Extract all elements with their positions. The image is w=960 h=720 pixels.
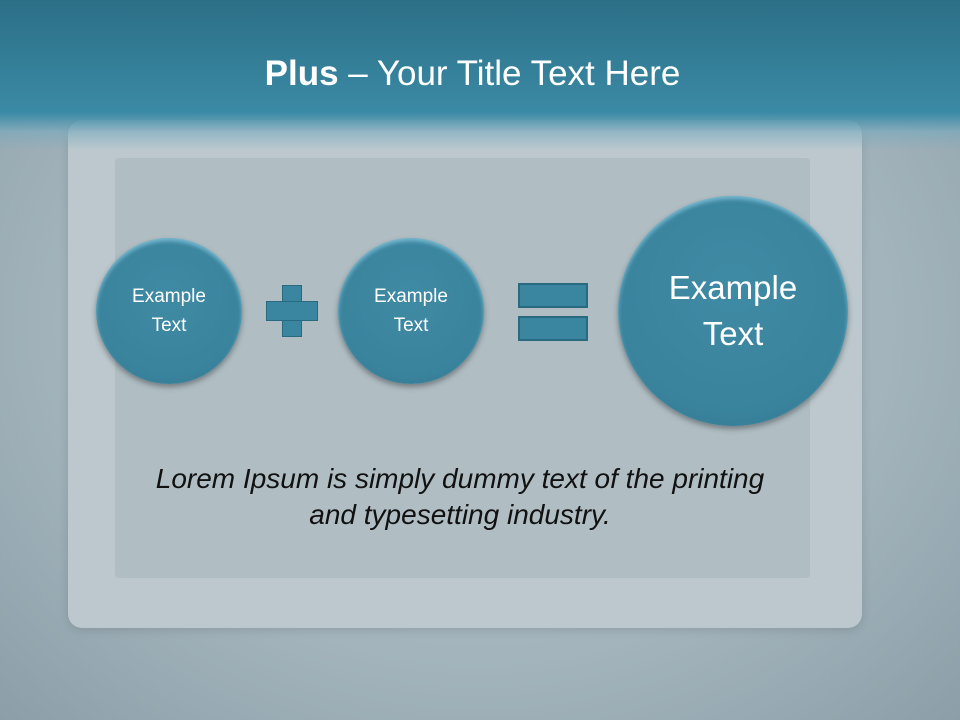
- header band: [0, 0, 960, 150]
- body text: and typesetting industry.: [309, 499, 611, 530]
- circle 2: [338, 238, 484, 384]
- circle 1: Text: [152, 315, 186, 336]
- circle 2: Example: [374, 286, 448, 307]
- circle 3: [618, 196, 848, 426]
- icon: equals: [518, 283, 588, 341]
- body text: [156, 463, 764, 530]
- icon: plus: [266, 285, 318, 337]
- body text: Lorem Ipsum is simply dummy text of the printing: [156, 463, 764, 494]
- title: Plus – Your Title Text Here: [265, 54, 680, 93]
- circle 3: Text: [703, 315, 763, 352]
- circle 1: [96, 238, 242, 384]
- circle 3: Example: [669, 269, 797, 306]
- tablet screen: [115, 158, 810, 578]
- circle 1: Example: [132, 286, 206, 307]
- tablet device: [68, 120, 862, 628]
- circle 2: Text: [394, 315, 428, 336]
